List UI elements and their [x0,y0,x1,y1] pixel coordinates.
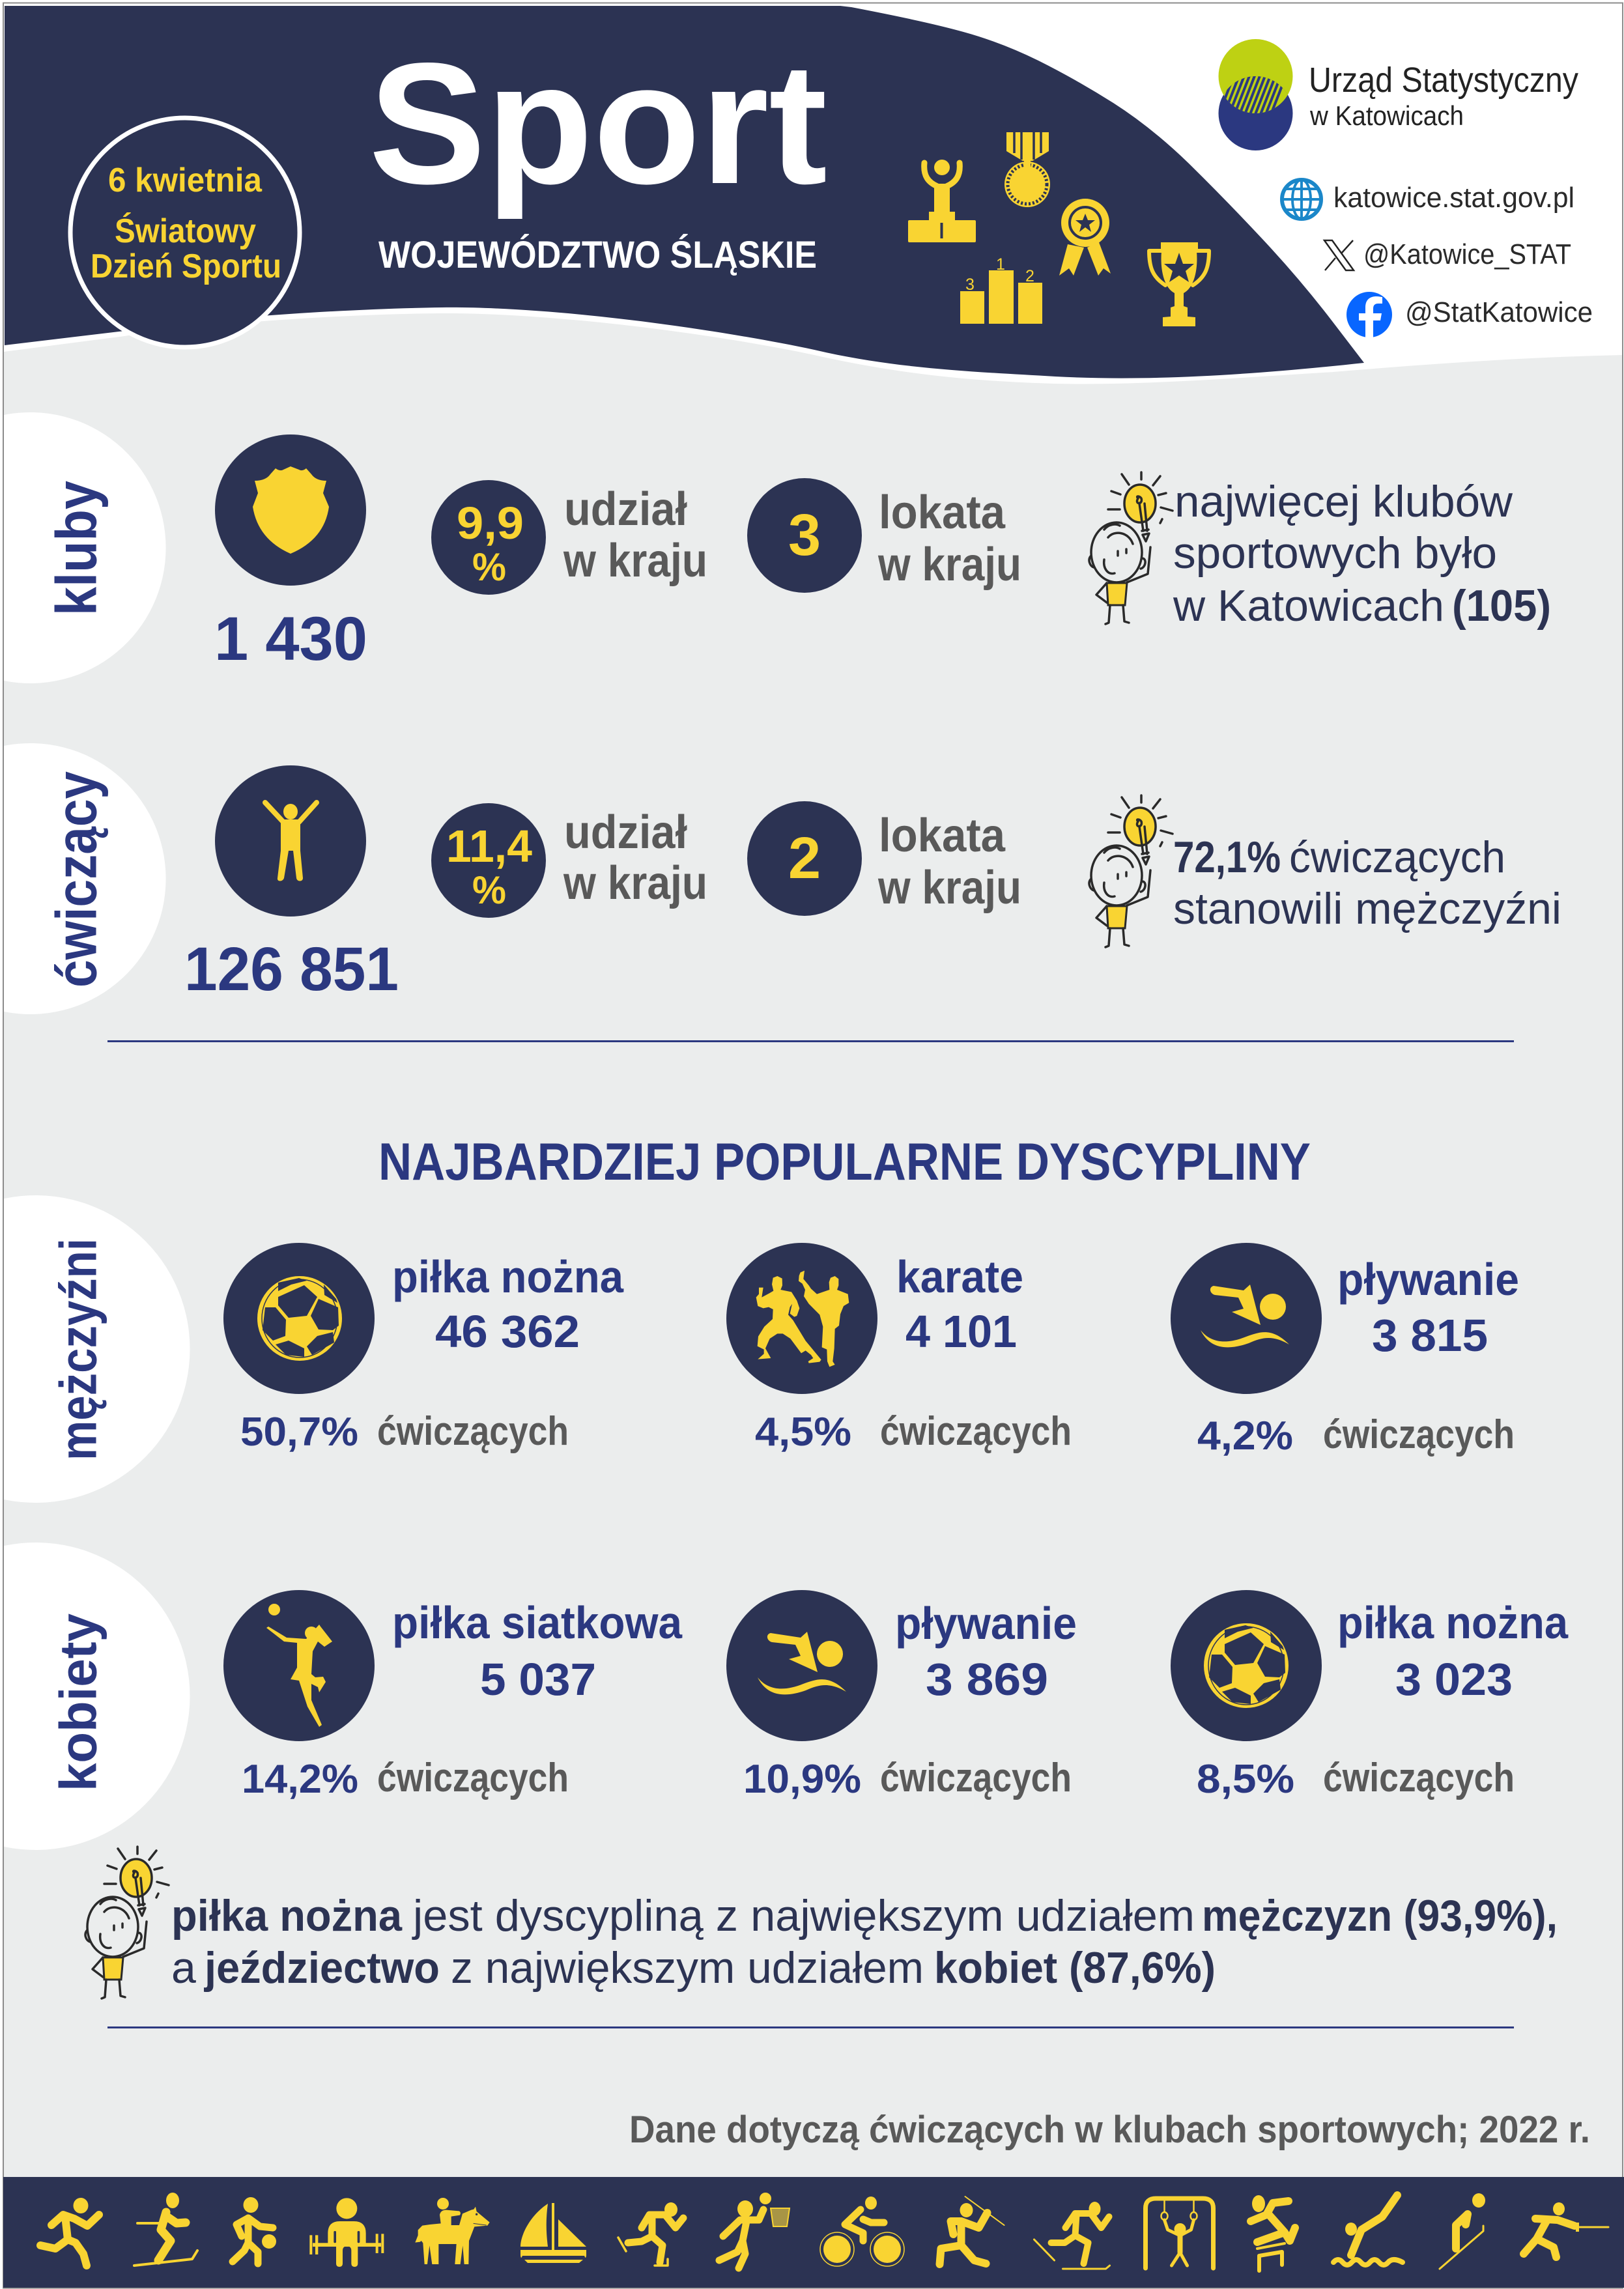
icon: fencer [1524,2202,1608,2257]
header band [5,6,1364,378]
icon: basketball [233,2197,276,2264]
share label [563,483,707,587]
discipline: piłka nożna: ćwiczących [377,1409,569,1454]
discipline: piłka siatkowa [223,1590,683,1802]
discipline: karate: 4,5% [755,1410,851,1455]
note: most clubs: sportowych było [1173,528,1497,578]
X link: @Katowice_STAT [1363,238,1571,270]
discipline: piłka nożna [1171,1590,1569,1802]
icon: sailboat [520,2203,586,2263]
discipline: karate [726,1243,1072,1455]
icon: rosette [1059,199,1111,276]
label: kobiety: kobiety [50,1614,107,1791]
icon: shield [215,434,366,586]
share label: udział [564,483,687,535]
discipline: piłka nożna: 46 362 [435,1306,580,1357]
panel: kluby [4,412,1551,683]
icon: character with bulb [85,1847,169,1998]
icon: skater [618,2202,683,2266]
icon: podium 1 2 3: 1 [996,255,1005,274]
rank badge [747,801,862,916]
share badge [431,480,546,595]
share badge: 11,4 [446,821,532,872]
discipline: piłka nożna: piłka nożna [1337,1597,1569,1648]
icon: podium 1 2 3 [960,255,1042,324]
share label: udział [564,806,687,859]
label: kobiety [4,1543,190,1850]
note: most clubs: (105) [1452,581,1551,631]
share badge: % [472,545,506,589]
icon: gymnast on rings [1145,2198,1213,2268]
icon: trophy [1149,242,1209,326]
icon: weightlifter [309,2198,384,2267]
rank label: w kraju [877,539,1021,591]
source note: Dane dotyczą ćwiczących w klubach sportowych; 2022 r. [629,2109,1590,2151]
note: football and horse riding: piłka nożna [171,1891,403,1941]
icon: character with bulb [1089,472,1173,624]
icon: winner on podium [908,160,976,242]
icon: hurdler [1251,2195,1295,2271]
panel: kobiety [4,1543,1569,1850]
label: ćwiczący [4,743,166,1014]
icon: ski jumper [1440,2193,1485,2269]
discipline: piłka nożna: ćwiczących [1323,1756,1515,1800]
note: football and horse riding: a [171,1943,196,1993]
icon: skier [134,2193,197,2266]
icon: cross-country skier [1034,2202,1110,2269]
discipline: pływanie: pływanie [895,1598,1077,1649]
discipline: pływanie: 10,9% [743,1757,861,1802]
discipline: piłka nożna [223,1243,624,1455]
discipline: karate: 4 101 [905,1306,1017,1357]
note: most clubs: najwięcej klubów [1175,477,1513,526]
footer band with sport icons [3,2177,1624,2288]
website link [1282,180,1574,219]
icon: podium 1 2 3: 2 [1025,267,1034,285]
discipline: pływanie [726,1590,1077,1802]
logo: Urząd Statystyczny [1215,39,1578,150]
icon: person with raised arms [215,765,366,917]
subtitle: WOJEWÓDZTWO ŚLĄSKIE [378,234,817,276]
note: football and horse riding: mężczyzn (93,9%), [1202,1891,1558,1941]
discipline: karate: karate [896,1251,1023,1302]
Facebook link [1346,292,1593,337]
label: ćwiczący: ćwiczący [44,771,108,988]
icon: horse rider [415,2198,490,2264]
discipline: pływanie: 4,2% [1197,1414,1293,1458]
discipline: piłka nożna: 8,5% [1197,1757,1294,1802]
discipline: pływanie: ćwiczących [1323,1412,1515,1457]
label: mężczyźni [4,1195,190,1503]
website link: katowice.stat.gov.pl [1333,182,1574,214]
rank label [877,810,1021,914]
badge: Światowy Dzień Sportu: Światowy [115,212,256,250]
discipline: piłka nożna: piłka nożna [392,1251,624,1302]
value: 1 430: 1 430 [214,604,367,674]
discipline: piłka siatkowa: 14,2% [242,1757,358,1802]
discipline: piłka siatkowa: piłka siatkowa [392,1597,683,1648]
label: kluby [4,412,166,683]
title: Sport [369,27,827,221]
share badge: 9,9 [457,498,524,548]
note: share of men: stanowili mężczyźni [1173,884,1561,933]
note: football and horse riding: jeździectwo [203,1943,440,1993]
discipline: piłka siatkowa: ćwiczących [377,1756,569,1800]
icon: basketball shot [719,2193,790,2268]
note: football and horse riding: z największym udziałem [451,1943,924,1993]
note: share of men: 72,1% [1173,832,1281,882]
rank label: w kraju [877,862,1021,914]
icon: javelin [939,2197,1004,2264]
note: football and horse riding [171,1891,1558,1993]
icon: runner [40,2198,99,2266]
share label: w kraju [563,857,707,909]
share badge: % [472,868,506,912]
discipline: pływanie: 3 815 [1372,1310,1488,1361]
rank label: lokata [879,810,1006,862]
note: share of men [1173,832,1561,933]
discipline: pływanie: 3 869 [926,1654,1048,1705]
note: most clubs: w Katowicach [1173,581,1444,631]
rank badge: 3 [788,503,821,568]
badge: Światowy Dzień Sportu: 6 kwietnia [108,162,263,199]
rank badge: 2 [788,826,821,891]
panel: mężczyźni [4,1195,1519,1503]
discipline: pływanie: pływanie [1337,1254,1519,1305]
icon: podium 1 2 3: 3 [965,276,975,294]
label: mężczyźni: mężczyźni [50,1238,107,1460]
note: football and horse riding: kobiet (87,6%) [934,1943,1216,1993]
icon: medal [1004,132,1050,207]
panel: ćwiczący [4,743,1561,1014]
icon: character with bulb [1089,795,1173,947]
share badge [431,803,546,918]
note: most clubs [1173,477,1551,631]
rank label: lokata [879,487,1006,539]
discipline: piłka siatkowa: 5 037 [480,1654,596,1705]
discipline: pływanie [1171,1243,1519,1458]
icon: cyclist [820,2197,904,2266]
logo: Urząd Statystyczny: Urząd Statystyczny [1309,61,1578,100]
rank badge [747,478,862,593]
discipline: piłka nożna: 3 023 [1395,1654,1513,1705]
badge: Światowy Dzień Sportu: Dzień Sportu [91,248,281,285]
icon: diver [1333,2195,1403,2265]
label: kluby: kluby [44,481,108,616]
share label: w kraju [563,535,707,587]
logo: Urząd Statystyczny: w Katowicach [1309,100,1464,131]
note: share of men: ćwiczących [1289,832,1505,882]
discipline: karate: ćwiczących [880,1409,1072,1454]
value: 126 851: 126 851 [184,935,399,1004]
rank label [877,487,1021,591]
badge: Światowy Dzień Sportu [70,118,300,347]
note: football and horse riding: jest dyscypliną z największym udziałem [412,1891,1195,1941]
heading: disciplines: NAJBARDZIEJ POPULARNE DYSCYPLINY [378,1133,1311,1191]
discipline: pływanie: ćwiczących [880,1756,1072,1800]
share label [563,806,707,909]
discipline: piłka nożna: 50,7% [240,1410,358,1455]
Facebook link: @StatKatowice [1405,296,1593,328]
